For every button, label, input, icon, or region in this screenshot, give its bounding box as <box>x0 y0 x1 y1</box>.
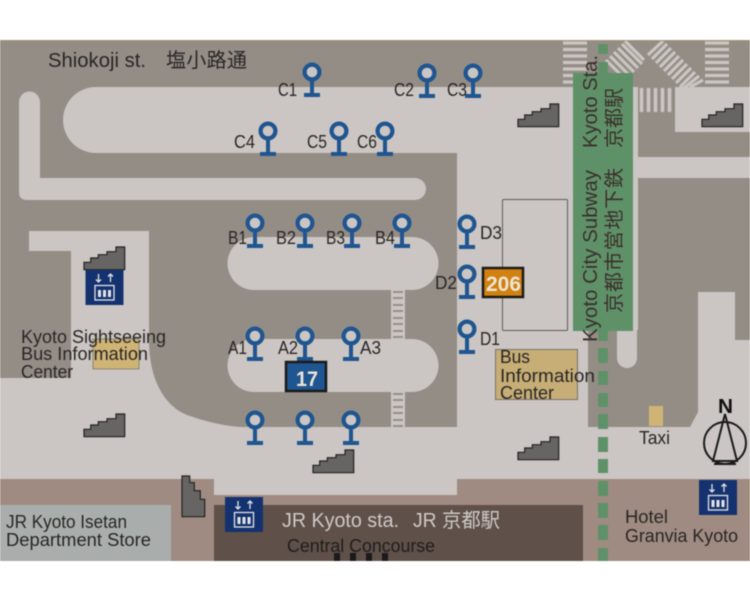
bus stops C: C5 <box>307 132 327 152</box>
pedestrian areas <box>0 87 750 495</box>
Isetan label <box>6 512 151 550</box>
JR Kyoto station label: JR Kyoto sta. <box>282 510 399 532</box>
bus stops B: B2 <box>276 228 296 248</box>
subway station labels: Kyoto City Subway <box>580 170 602 342</box>
north compass <box>704 396 746 464</box>
central concourse block <box>214 505 583 561</box>
top edge line <box>0 40 750 41</box>
Isetan label: Department Store <box>6 530 151 550</box>
bus stops B: B3 <box>326 228 345 248</box>
bus stops B: B4 <box>375 228 395 248</box>
street name: Shiokoji st. <box>48 50 146 72</box>
Kyoto Sightseeing Bus Information Center label <box>21 327 166 382</box>
Central Concourse label: Central Concourse <box>287 536 435 556</box>
Isetan department store block <box>0 505 171 561</box>
Bus Information Center box <box>496 350 578 400</box>
north compass: N <box>718 396 733 418</box>
entrance marks <box>337 553 385 561</box>
taxi label: Taxi <box>639 428 670 448</box>
badge 206 <box>483 268 523 297</box>
JR Kyoto station label <box>282 509 500 532</box>
bus stops A: A2 <box>278 338 298 358</box>
bus stops C: C3 <box>447 80 467 100</box>
subway station labels: Kyoto Sta. <box>580 55 602 148</box>
Bus Information Center label: Bus <box>500 347 530 367</box>
bus stops D <box>435 217 502 352</box>
Bus Information Center label: Center <box>500 383 554 403</box>
badge 17 <box>286 362 326 391</box>
subway dashed line <box>598 44 608 561</box>
subway station labels: 京都駅 <box>603 88 626 148</box>
elevators <box>86 270 737 532</box>
Kyoto Sightseeing Bus Information Center label: Center <box>21 362 73 382</box>
bus stops D: D3 <box>480 223 502 243</box>
Kyoto Sightseeing Bus Information Center label: Bus Information <box>21 344 148 364</box>
bus stops C: C1 <box>278 80 297 100</box>
taxi stand <box>649 406 663 426</box>
street name in Japanese: 塩小路通 <box>166 49 247 72</box>
bus stops B: B1 <box>228 228 247 248</box>
subway line band <box>573 73 633 331</box>
JR Kyoto station label: JR 京都駅 <box>413 509 500 532</box>
Kyoto Sightseeing info box <box>93 339 139 369</box>
Bus Information Center label <box>500 347 595 403</box>
bus stops D: D2 <box>435 273 457 293</box>
bus stops C: C2 <box>394 80 414 100</box>
Hotel label: Granvia Kyoto <box>625 526 738 546</box>
subway station labels <box>580 55 626 342</box>
subway station labels: 京都市営地下鉄 <box>603 168 626 313</box>
Hotel label <box>625 507 738 546</box>
bus stops A: A1 <box>228 338 247 358</box>
bus stops A <box>228 329 381 359</box>
bus stops B <box>228 216 410 248</box>
bus stops A: A3 <box>360 338 381 358</box>
badge 206: 206 <box>486 273 521 296</box>
building outline <box>502 200 568 330</box>
bus stops D: D1 <box>480 329 500 349</box>
badge 17: 17 <box>296 368 318 391</box>
bus stops C: C6 <box>357 132 377 152</box>
Isetan label: JR Kyoto Isetan <box>6 512 127 532</box>
bottom building strip <box>0 479 750 561</box>
bus stops C: C4 <box>234 132 255 152</box>
stairs <box>84 104 743 517</box>
Bus Information Center label: Information <box>500 366 595 386</box>
bus stops lower row <box>247 413 359 443</box>
Kyoto Sightseeing Bus Information Center label: Kyoto Sightseeing <box>21 327 166 347</box>
crosswalks <box>393 41 729 426</box>
Hotel label: Hotel <box>625 507 668 527</box>
bus stops C <box>234 65 481 154</box>
